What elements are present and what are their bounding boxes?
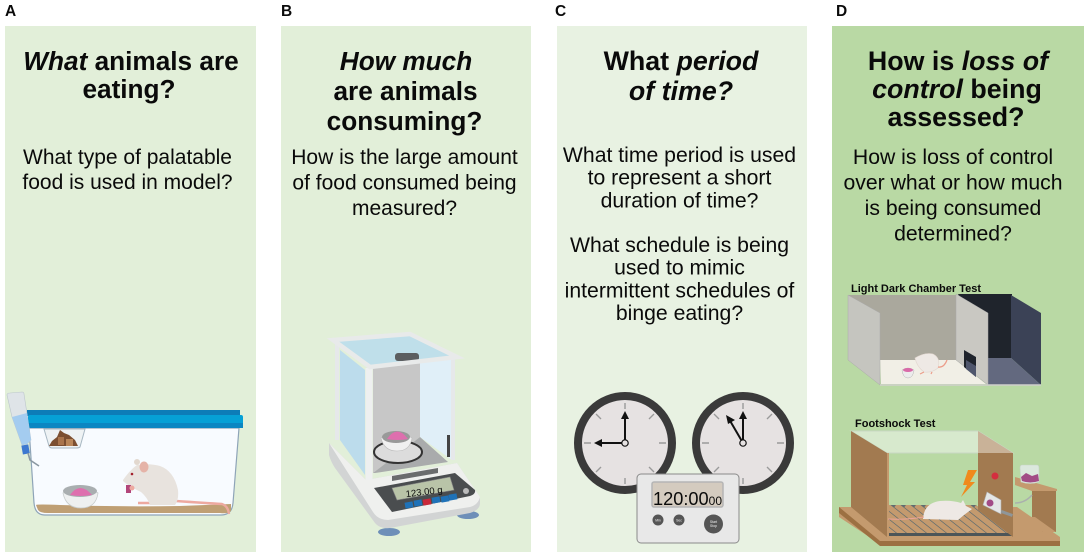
timer readout: 120:0000: [653, 489, 722, 509]
icon: digital timer: [637, 474, 739, 543]
text block A: food is used in model?: [22, 171, 233, 194]
heading D: being: [970, 74, 1042, 104]
icon: chamber rat: [915, 354, 939, 372]
icon: digital timer: Min: [655, 518, 661, 522]
label: light dark chamber test: Light Dark Chamber Test: [851, 283, 981, 295]
icon: analytical balance: [329, 334, 480, 536]
text block C: to represent a short: [588, 167, 771, 190]
text block C schedule: binge eating?: [616, 302, 743, 325]
heading B: are animals: [333, 76, 478, 106]
heading C: What period: [604, 46, 758, 76]
text block B: of food consumed being: [292, 172, 517, 194]
panel: D loss of control: [832, 3, 1084, 552]
heading A: eating?: [82, 74, 176, 104]
panel letter B: B: [281, 3, 292, 20]
text block D: How is loss of control: [853, 146, 1053, 169]
text block B: measured?: [352, 197, 457, 220]
icon: footshock rat: [923, 500, 972, 520]
heading B: How much: [340, 46, 472, 76]
text block C: What time period is used: [563, 144, 796, 167]
text block C schedule: used to mimic: [614, 257, 745, 280]
panel letter D: D: [836, 3, 847, 20]
icon: digital timer: Stop: [710, 524, 717, 528]
panel: A what animals are eating: [5, 3, 256, 552]
icon: digital timer: Sec: [676, 518, 682, 522]
panel letter C: C: [555, 3, 566, 20]
icon: lever and pellet: [983, 492, 1001, 514]
icon: light dark chamber: [848, 294, 1041, 385]
panel letter A: A: [5, 3, 16, 20]
scale reading: 123.00 g: [405, 485, 443, 500]
text block C schedule: What schedule is being: [570, 234, 789, 257]
icon: footshock apparatus: [839, 431, 1060, 546]
panel: C what period of time: [555, 3, 807, 552]
icon: red light: [992, 472, 998, 480]
heading D: control: [872, 74, 964, 104]
icon: food jar: [1020, 465, 1039, 484]
panel: B how much are animals consuming: [281, 3, 531, 552]
text block D: over what or how much: [843, 172, 1063, 194]
icon: clock right: [696, 396, 790, 490]
icon: clock left: [578, 396, 672, 490]
icon: water bottle: [7, 392, 39, 466]
text block C: duration of time?: [601, 189, 758, 212]
icon: digital timer: Start: [710, 520, 717, 524]
heading A: What animals are: [23, 46, 239, 76]
label: footshock test: Footshock Test: [855, 418, 936, 430]
heading D: How is loss of: [868, 46, 1048, 76]
heading B: consuming?: [327, 106, 482, 136]
icon: rat cage: [7, 392, 243, 515]
text block C schedule: intermittent schedules of: [565, 279, 794, 302]
heading D: assessed?: [887, 102, 1025, 132]
text block A: What type of palatable: [23, 146, 232, 169]
icon: food hopper: [44, 429, 85, 448]
text block D: is being consumed: [865, 197, 1041, 220]
text block B: How is the large amount: [291, 146, 518, 169]
icon: white rat: [123, 459, 229, 514]
icon: food bowl: [63, 485, 98, 508]
heading C: of time?: [629, 76, 733, 106]
text block D: determined?: [894, 222, 1012, 246]
icon: chamber bowl: [902, 368, 914, 378]
icon: lightning bolt: [961, 470, 977, 497]
